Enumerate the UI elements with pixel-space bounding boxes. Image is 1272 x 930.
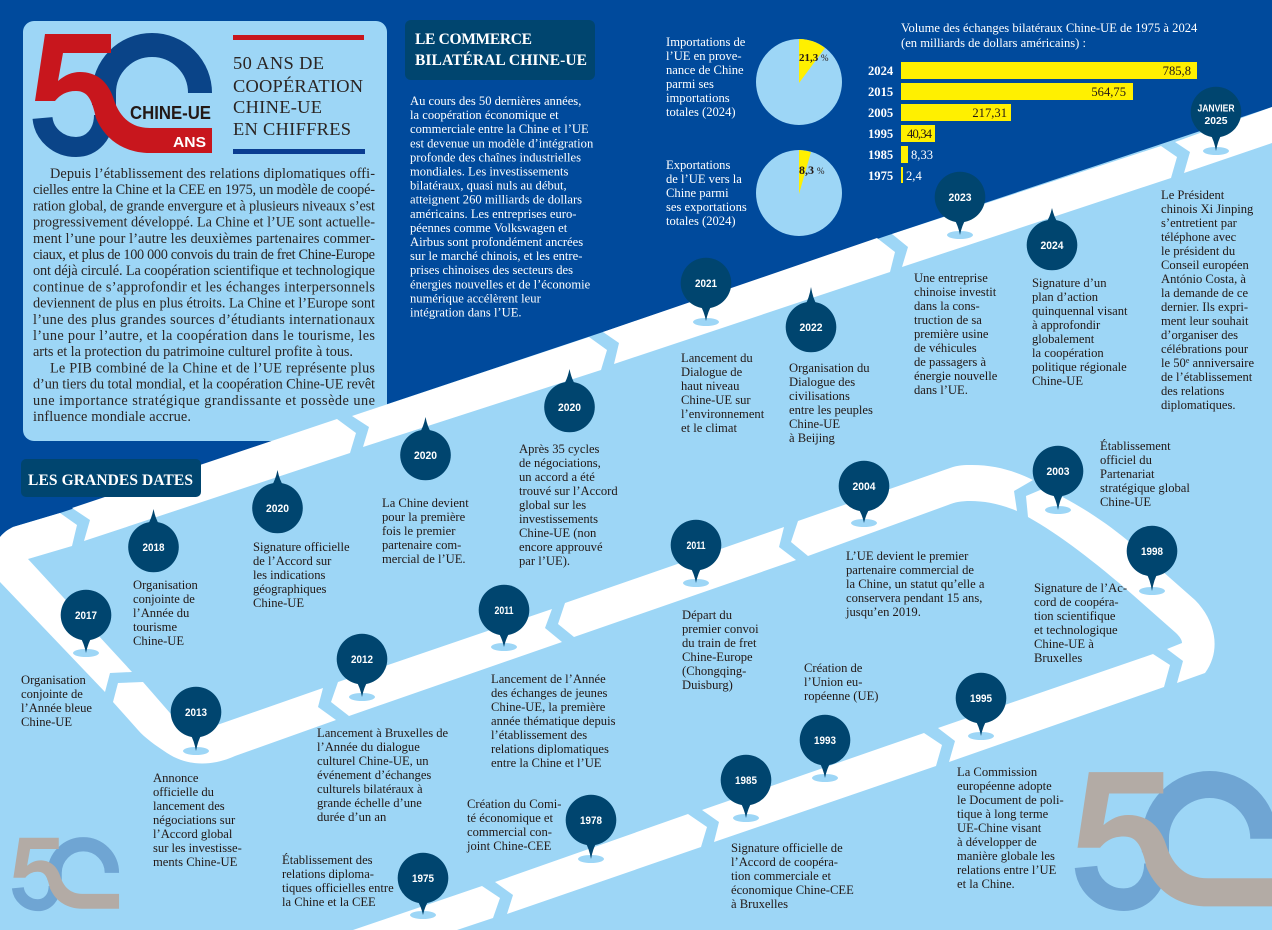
text: 2020 indications: Signature officielle xyxy=(253,540,350,554)
text: commerce bilatéral: mondiales. Les investissements xyxy=(410,164,569,178)
pin: 1978: 1978 xyxy=(580,815,602,827)
text: 1995: manière globale les xyxy=(957,849,1055,863)
text: 2020 accord: Après 35 cycles xyxy=(519,442,600,456)
pie chart: importations: 21,3 % xyxy=(799,52,829,64)
heading box: le commerce bilatéral xyxy=(405,20,595,80)
text: 2012: culturel Chine-UE, un xyxy=(317,754,429,768)
pie chart: importations: Importations de xyxy=(666,35,746,49)
text: 2013: ments Chine-UE xyxy=(153,855,238,869)
text: 2020 indications: géographiques xyxy=(253,582,327,596)
text: 2020 indications: les indications xyxy=(253,568,326,582)
text: 2020 partenaire: fois le premier xyxy=(382,524,456,538)
pin: 2020 accord xyxy=(544,369,595,432)
text: 2020 accord: encore approuvé xyxy=(519,540,603,554)
text: 2020 indications: Chine-UE xyxy=(253,596,304,610)
text: 1985: Signature officielle de xyxy=(731,841,843,855)
text: 2023: Une entreprise xyxy=(914,271,988,285)
pin: 2017 xyxy=(61,590,111,657)
text: 2020 accord: par l’UE). xyxy=(519,554,570,568)
text: 2013: officielle du xyxy=(153,785,215,799)
bar chart: volume des échanges: 8,33 xyxy=(911,148,933,162)
panel heading: EN CHIFFRES xyxy=(233,119,351,139)
pin: janvier 2025: 2025 xyxy=(1204,115,1228,127)
text: 2020 accord: un accord a été xyxy=(519,470,595,484)
pie chart: importations: l’UE en prove- xyxy=(666,49,742,63)
text: 2011 jeunes: l’établissement des xyxy=(491,728,587,742)
bar chart: volume des échanges: Volume des échanges bilatéraux Chine-UE de 1975 à 2024 xyxy=(901,21,1198,35)
text: 2011 convoi: (Chongqing- xyxy=(682,664,746,678)
pin: 1993: 1993 xyxy=(814,735,836,747)
watermark: large 50 xyxy=(1078,772,1272,906)
bar chart: volume des échanges: 1995 xyxy=(868,127,893,141)
text: 2024: politique régionale xyxy=(1032,360,1127,374)
text: 2003: stratégique global xyxy=(1100,481,1190,495)
logo: 50 ans Chine-UE: ANS xyxy=(173,134,206,151)
pin: 2013: 2013 xyxy=(185,707,207,719)
text: janvier 2025: dernier. Ils expri- xyxy=(1161,300,1248,314)
text: 2020 accord: trouvé sur l’Accord xyxy=(519,484,618,498)
pie chart: exportations: Exportations xyxy=(666,158,730,172)
text: 2023: première usine xyxy=(914,327,989,341)
text: 2013: lancement des xyxy=(153,799,225,813)
pin: 2023 xyxy=(935,172,985,239)
text: 2011 jeunes: Lancement de l’Année xyxy=(491,672,606,686)
text: 2004: partenaire commercial de xyxy=(846,563,974,577)
intro text: continue de s’approfondir et les échanges interpersonnels xyxy=(33,279,375,295)
text: 2020 indications: de l’Accord sur xyxy=(253,554,332,568)
panel heading xyxy=(233,35,365,154)
bar chart: volume des échanges: 564,75 xyxy=(1091,85,1126,99)
text: 2020 accord: Chine-UE (non xyxy=(519,526,597,540)
text: 1978: joint Chine-CEE xyxy=(466,839,552,853)
panel heading: CHINE-UE xyxy=(233,97,322,117)
pie chart: importations xyxy=(666,35,842,125)
logo: 50 ans Chine-UE: CHINE-UE xyxy=(130,103,211,123)
text: 2004: jusqu’en 2019. xyxy=(845,605,921,619)
pin: 2024: 2024 xyxy=(1040,240,1064,252)
intro text: ment l’une pour l’autre les deuxièmes partenaires commer- xyxy=(33,231,375,247)
intro text: ciaux, et plus de 100 000 convois du train de fret Chine-Europe xyxy=(33,247,375,263)
pie chart: exportations: Chine parmi xyxy=(666,186,729,200)
pin: 1998 xyxy=(1127,526,1177,595)
text: 1978: Création du Comi- xyxy=(467,797,561,811)
heading box: le commerce bilatéral: BILATÉRAL CHINE-UE xyxy=(415,52,587,69)
bar chart: volume des échanges: 2024 xyxy=(868,64,894,78)
text: janvier 2025: s’entretient par xyxy=(1161,216,1238,230)
text: 1985: tion commerciale et xyxy=(731,869,832,883)
text: 2023: de véhicules xyxy=(914,341,977,355)
text: 2021: Chine-UE sur xyxy=(681,393,751,407)
bar chart: volume des échanges: 1985 xyxy=(868,148,893,162)
text: 2011 convoi: premier convoi xyxy=(682,622,759,636)
text: 2013: Annonce xyxy=(153,771,199,785)
background: dark blue upper area xyxy=(0,0,1272,537)
text: 2020 partenaire: mercial de l’UE. xyxy=(382,552,466,566)
text: 2024: globalement xyxy=(1032,332,1095,346)
pin: 2011 convoi: 2011 xyxy=(686,540,706,552)
intro text: une importance stratégique grandissante et possède une xyxy=(33,393,375,409)
text: 1985: à Bruxelles xyxy=(731,897,788,911)
text: commerce bilatéral: est devenue un modèle d’intégration xyxy=(410,136,594,150)
pie chart: exportations xyxy=(666,150,842,236)
text: 2024: quinquennal visant xyxy=(1032,304,1128,318)
pin: 2003 xyxy=(1033,446,1083,514)
pin: 1998: 1998 xyxy=(1141,546,1163,558)
pin: 2018 xyxy=(128,509,179,572)
pin: 2012 xyxy=(337,634,387,701)
text: janvier 2025: diplomatiques. xyxy=(1161,398,1236,412)
text: 1985: l’Accord de coopéra- xyxy=(731,855,838,869)
pie chart: exportations: 8,3 % xyxy=(799,163,825,177)
text: 2012: l’Année du dialogue xyxy=(317,740,420,754)
text: 2024: à approfondir xyxy=(1032,318,1101,332)
text: 2018: l’Année du xyxy=(133,606,190,620)
text: 2003: Chine-UE xyxy=(1100,495,1151,509)
text: janvier 2025: anniversaire xyxy=(1189,356,1255,370)
watermark: small 50 xyxy=(13,838,119,909)
text: 2024: plan d’action xyxy=(1032,290,1099,304)
intro text: deviennent de plus en plus étroits. La Chine et l’Europe sont xyxy=(33,296,375,312)
logo: 50 ans Chine-UE xyxy=(35,34,212,153)
pin: 1995 xyxy=(956,673,1006,740)
heading box: les grandes dates: LES GRANDES DATES xyxy=(28,472,193,489)
text: commerce bilatéral: Au cours des 50 dernières années, xyxy=(410,94,581,108)
text: 2021: et le climat xyxy=(681,421,737,435)
text: 2017: conjointe de xyxy=(21,687,83,701)
text: 2024: Signature d’un xyxy=(1032,276,1107,290)
text: 2004: L’UE devient le premier xyxy=(846,549,969,563)
pin: 2022: 2022 xyxy=(800,322,822,334)
text: 1995: à développer de xyxy=(957,835,1037,849)
text: 2011 jeunes: des échanges de jeunes xyxy=(491,686,608,700)
text: 1998: Chine-UE à xyxy=(1034,637,1094,651)
text: 2023: dans l’UE. xyxy=(914,383,968,397)
pin: 2021 xyxy=(681,258,731,326)
pin: 2024 xyxy=(1027,208,1077,270)
text: 2023: truction de sa xyxy=(914,313,982,327)
text: janvier 2025: d’organiser des xyxy=(1161,328,1238,342)
text: 1993: l’Union eu- xyxy=(804,675,862,689)
text: 1995: relations entre l’UE xyxy=(957,863,1057,877)
intro text: arts et la protection du patrimoine culturel profite à tous. xyxy=(33,344,353,360)
pin: 2020 indications xyxy=(252,470,303,533)
intro text: ont déjà circulé. La coopération scientifique et technologique xyxy=(33,263,375,279)
intro text xyxy=(33,166,375,425)
text: janvier 2025: chinois Xi Jinping xyxy=(1161,202,1254,216)
text: commerce bilatéral: bilatéraux, quasi nuls au début, xyxy=(410,179,567,193)
text: 2020 accord: de négociations, xyxy=(519,456,601,470)
pin: 2004 xyxy=(839,461,889,527)
text: 2020 accord: investissements xyxy=(519,512,598,526)
pin: 2013 xyxy=(171,687,221,755)
text: 2023: de passagers à xyxy=(914,355,986,369)
text: 2023: dans la cons- xyxy=(914,299,980,313)
text: 2011 convoi: Chine-Europe xyxy=(682,650,753,664)
text: 2018: Organisation xyxy=(133,578,199,592)
pin: 2023: 2023 xyxy=(948,192,972,204)
text: 1995: le Document de poli- xyxy=(957,793,1064,807)
text: janvier 2025: Le Président xyxy=(1161,188,1225,202)
pin: 1978 xyxy=(566,795,616,863)
pin: 2020 partenaire: 2020 xyxy=(414,450,437,462)
panel heading: 50 ANS DE xyxy=(233,53,324,73)
text: 1998: cord de coopéra- xyxy=(1034,595,1119,609)
bar chart: volume des échanges xyxy=(868,21,1198,183)
pie chart: exportations: de l’UE vers la xyxy=(666,172,742,186)
pin: 1993 xyxy=(800,715,850,782)
text: 2004: conservera pendant 15 ans, xyxy=(846,591,982,605)
bar chart: volume des échanges: 40,34 xyxy=(907,127,933,141)
pin: 1985 xyxy=(721,755,771,822)
pie chart: exportations: ses exportations xyxy=(666,200,747,214)
pie chart: importations: nance de Chine xyxy=(666,63,744,77)
text: 1995: La Commission xyxy=(957,765,1038,779)
text: commerce bilatéral: intégration dans l’UE. xyxy=(410,306,522,320)
text: janvier 2025: e xyxy=(1186,356,1190,365)
text: commerce bilatéral: énergies nouvelles et de l’économie xyxy=(410,277,591,291)
text: 1975: la Chine et la CEE xyxy=(282,895,376,909)
pin: 2011 convoi xyxy=(671,520,721,587)
bar chart: volume des échanges: (en milliards de dollars américains) : xyxy=(901,36,1086,50)
text: 2020 partenaire: partenaire com- xyxy=(382,538,461,552)
pin: 2017: 2017 xyxy=(75,610,97,622)
pin: 2021: 2021 xyxy=(695,278,717,290)
intro text: l’une pour l’autre, et la coopération dans le tourisme, les xyxy=(33,328,375,344)
text: 2022: à Beijing xyxy=(789,431,836,445)
text: commerce bilatéral: profonde des chaînes industrielles xyxy=(410,150,581,164)
pie chart: importations: parmi ses xyxy=(666,77,714,91)
bar chart: volume des échanges: 2015 xyxy=(868,85,893,99)
text: janvier 2025: des relations xyxy=(1161,384,1224,398)
text: janvier 2025: de l’établissement xyxy=(1161,370,1253,384)
text: 1995: UE-Chine visant xyxy=(957,821,1042,835)
text: 2021: l’environnement xyxy=(681,407,765,421)
pin: 2022 xyxy=(786,287,836,352)
text: janvier 2025: ment leur souhait xyxy=(1161,314,1249,328)
text: 2017: l’Année bleue xyxy=(21,701,92,715)
text: 2012: grande échelle d’une xyxy=(317,796,422,810)
text: 2011 convoi: Départ du xyxy=(682,608,733,622)
text: 2022: civilisations xyxy=(789,389,850,403)
pin: 1985: 1985 xyxy=(735,775,757,787)
text: 2012: durée d’un an xyxy=(317,810,387,824)
intro text: Le PIB combiné de la Chine et de l’UE représente plus xyxy=(50,360,375,376)
pin: 2020 partenaire xyxy=(400,417,451,480)
text: 1975: tiques officielles entre xyxy=(282,881,394,895)
bar chart: volume des échanges: 785,8 xyxy=(1163,64,1191,78)
intro text: influence mondiale accrue. xyxy=(33,409,191,425)
text: 1975: relations diploma- xyxy=(282,867,374,881)
text: 2018: tourisme xyxy=(133,620,177,634)
text: janvier 2025: le 50 xyxy=(1161,356,1255,370)
text: 2011 jeunes: entre la Chine et l’UE xyxy=(491,756,602,770)
pin: 1995: 1995 xyxy=(970,693,992,705)
pin: janvier 2025: JANVIER xyxy=(1198,102,1235,114)
text: 2018: Chine-UE xyxy=(133,634,184,648)
pin: 2011 jeunes xyxy=(479,585,529,651)
text: 2012: culturels bilatéraux à xyxy=(317,782,423,796)
text: 2018: conjointe de xyxy=(133,592,195,606)
pin: janvier 2025 xyxy=(1191,87,1241,155)
text: janvier 2025: le président du xyxy=(1161,244,1236,258)
text: 2011 jeunes: année thématique depuis xyxy=(491,714,616,728)
intro text: d’un tiers du total mondial, et la coopération Chine-UE revêt xyxy=(33,377,375,393)
text: 1993: ropéenne (UE) xyxy=(804,689,878,703)
text: commerce bilatéral: atteignent 260 milliards de dollars xyxy=(410,193,582,207)
text: 2020 partenaire: La Chine devient xyxy=(382,496,469,510)
text: commerce bilatéral: prises chinoises des secteurs des xyxy=(410,263,573,277)
bar chart: volume des échanges: 217,31 xyxy=(972,106,1007,120)
text: 2020 accord: global sur les xyxy=(519,498,586,512)
pin: 1975: 1975 xyxy=(412,873,434,885)
text: commerce bilatéral: commerciale entre la Chine et l’UE xyxy=(410,122,589,136)
text: 2021: Dialogue de xyxy=(681,365,743,379)
text: 2024: la coopération xyxy=(1032,346,1104,360)
text: 1995: et la Chine. xyxy=(957,877,1015,891)
text: 2020 partenaire: pour la première xyxy=(382,510,466,524)
text: 2013: sur les investisse- xyxy=(153,841,242,855)
pie chart: importations: totales (2024) xyxy=(666,105,736,119)
text: commerce bilatéral: Airbus sont profondément ancrées xyxy=(410,235,583,249)
pin: 1975 xyxy=(398,853,448,919)
text: janvier 2025: António Costa, à xyxy=(1161,272,1246,286)
text: commerce bilatéral: numérique accélèrent leur xyxy=(410,291,542,305)
intro text: progressivement développé. La Chine et l’UE sont actuelle- xyxy=(33,215,375,231)
text: 2012: Lancement à Bruxelles de xyxy=(317,726,449,740)
text: 2022: Dialogue des xyxy=(789,375,855,389)
text: 1995: tique à long terme xyxy=(957,807,1049,821)
text: 2011 jeunes: relations diplomatiques xyxy=(491,742,609,756)
text: 2004: la Chine, un statut qu’elle a xyxy=(846,577,985,591)
text: 2013: négociations sur xyxy=(153,813,236,827)
bar chart: volume des échanges: 1975 xyxy=(868,169,893,183)
text: 2017: Chine-UE xyxy=(21,715,72,729)
text: 1978: commercial con- xyxy=(467,825,552,839)
text: 1993: Création de xyxy=(804,661,863,675)
bar chart: volume des échanges: 2,4 xyxy=(906,169,922,183)
text: 1975: Établissement des xyxy=(282,853,373,867)
intro text: Depuis l’établissement des relations diplomatiques offi- xyxy=(50,166,375,182)
pin: 2011 jeunes: 2011 xyxy=(494,605,514,617)
text: commerce bilatéral: sur le marché chinois, et les entre- xyxy=(410,249,582,263)
text: 1978: té économique et xyxy=(467,811,554,825)
text: commerce bilatéral: la coopération économique et xyxy=(410,108,559,122)
panel heading: COOPÉRATION xyxy=(233,75,363,96)
pie chart: importations: importations xyxy=(666,91,730,105)
text: 1998: et technologique xyxy=(1034,623,1118,637)
text: janvier 2025: Conseil européen xyxy=(1161,258,1249,272)
intro text: l’une des plus grandes sources d’étudiants internationaux xyxy=(33,312,375,328)
text: 1985: économique Chine-CEE xyxy=(731,883,854,897)
text: 1998: Bruxelles xyxy=(1034,651,1082,665)
pin: 2004: 2004 xyxy=(852,481,876,493)
text: 2003: officiel du xyxy=(1100,453,1153,467)
text: 2003: Partenariat xyxy=(1100,467,1155,481)
text: 2023: chinoise investit xyxy=(914,285,997,299)
pin: 2012: 2012 xyxy=(351,654,373,666)
text: 2022: Organisation du xyxy=(789,361,870,375)
text: 1998: tion scientifique xyxy=(1034,609,1116,623)
pin: 2020 accord: 2020 xyxy=(558,402,581,414)
pin: 2003: 2003 xyxy=(1046,466,1070,478)
text: 2023: énergie nouvelle xyxy=(914,369,998,383)
text: 2011 convoi: Duisburg) xyxy=(682,678,733,692)
text: janvier 2025: célébrations pour xyxy=(1161,342,1249,356)
heading box: le commerce bilatéral: LE COMMERCE xyxy=(415,31,532,48)
pin: 2020 indications: 2020 xyxy=(266,503,289,515)
text: 1995: européenne adopte xyxy=(957,779,1052,793)
text: 2021: haut niveau xyxy=(681,379,740,393)
text: 2012: événement d’échanges xyxy=(317,768,431,782)
pin: 2018: 2018 xyxy=(142,542,164,554)
text: 2021: Lancement du xyxy=(681,351,753,365)
text: 2011 convoi: du train de fret xyxy=(682,636,757,650)
text: commerce bilatéral: américains. Les entreprises euro- xyxy=(410,207,576,221)
text: janvier 2025: la demande de ce xyxy=(1161,286,1248,300)
text: 2017: Organisation xyxy=(21,673,87,687)
pie chart: exportations: totales (2024) xyxy=(666,214,736,228)
bar chart: volume des échanges: 2005 xyxy=(868,106,893,120)
text: 2022: entre les peuples xyxy=(789,403,873,417)
intro text: ration global, de grande envergure et à plusieurs niveaux s’est xyxy=(33,198,375,214)
text: 2024: Chine-UE xyxy=(1032,374,1083,388)
intro text: cielles entre la Chine et la CEE en 1975, un modèle de coopé- xyxy=(33,182,375,198)
text: 2003: Établissement xyxy=(1100,439,1171,453)
text: commerce bilatéral: péennes comme Volkswagen et xyxy=(410,221,568,235)
text: 1998: Signature de l’Ac- xyxy=(1034,581,1127,595)
heading box: les grandes dates xyxy=(21,459,201,497)
text: 2013: l’Accord global xyxy=(153,827,233,841)
text: janvier 2025: téléphone avec xyxy=(1161,230,1237,244)
text: 2011 jeunes: Chine-UE, la première xyxy=(491,700,606,714)
panel: introduction xyxy=(23,21,387,441)
text: 2022: Chine-UE xyxy=(789,417,840,431)
